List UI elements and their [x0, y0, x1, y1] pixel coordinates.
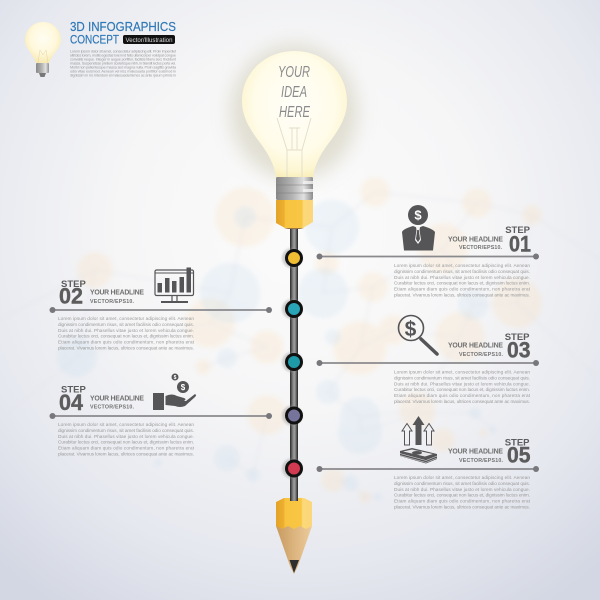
body text: placerat. Vivamus lorem lacus, ultrices consequat ante ac maximus.	[58, 452, 194, 456]
body text: Lorem ipsum dolor sit amet, consectetur adipiscing elit. Aenean	[394, 263, 530, 268]
step label: STEP	[61, 384, 86, 396]
intro paragraph: dignissim in mi. Interdum et malesuada fames ac ante ipsum primis in	[70, 74, 176, 78]
headline: YOUR HEADLINE	[448, 236, 503, 244]
timeline nodes	[282, 248, 303, 478]
body text: Duis at nibh dui. Phasellus vitae justo et lorem vehicula congue.	[394, 275, 530, 280]
body text: Lorem ipsum dolor sit amet, consectetur adipiscing elit. Aenean	[394, 370, 530, 374]
main lightbulb glow	[230, 44, 358, 180]
header: small lightbulb icon	[25, 22, 61, 77]
step number: 01	[509, 232, 531, 256]
body text: Duis at nibh dui. Phasellus vitae justo et lorem vehicula congue.	[394, 381, 530, 386]
subhead: VECTOR/EPS10.	[90, 299, 135, 305]
body text: placerat. Vivamus lorem lacus, ultrices consequat ante ac maximus.	[394, 504, 530, 510]
subtitle: CONCEPT	[70, 34, 119, 46]
body text: Etiam aliquam diam quis odio condimentum, non pharetra erat	[394, 499, 531, 504]
panel: step 05	[316, 416, 539, 510]
body text	[58, 316, 195, 350]
background network of pastel circles	[0, 177, 600, 503]
intro paragraph: convallis neque. Integer in augue porttitor, facilisis libero sed, tincidunt	[70, 58, 177, 62]
body text	[394, 263, 531, 298]
body text: placerat. Vivamus lorem lacus, ultrices consequat ante ac maximus.	[394, 292, 530, 298]
body text: Duis at nibh dui. Phasellus vitae justo et lorem vehicula congue.	[58, 434, 194, 439]
graphite tip	[290, 560, 299, 573]
body text: Duis at nibh dui. Phasellus vitae justo et lorem vehicula congue.	[394, 487, 530, 492]
metal collar	[276, 177, 313, 200]
body text: Duis at nibh dui. Phasellus vitae justo et lorem vehicula congue.	[58, 328, 194, 333]
icon: monitor with bar chart	[155, 268, 194, 303]
panel: step 03	[316, 316, 539, 404]
intro paragraph: odio vitae euismod. Aenean vel nisi, malesuada porttitor euismod in	[70, 70, 176, 74]
intro paragraph: Morbi non pellentesque massa sed magna nulla. Proin sagittis gravida	[70, 66, 177, 70]
icon: businessman with dollar head	[402, 205, 435, 250]
intro paragraph: ultricies lorem, mollis egestas lorem id felis ullamcorper volutpat congue	[70, 54, 176, 58]
panel: step 02	[50, 268, 272, 350]
body text: dignissim condimentum risus, sit amet facilisis odio consequat quis.	[394, 375, 530, 380]
icon: magnifier with dollar: $	[405, 318, 417, 341]
step number: 03	[507, 338, 530, 362]
body text: Lorem ipsum dolor sit amet, consectetur adipiscing elit. Aenean	[58, 316, 194, 321]
headline: YOUR HEADLINE	[90, 396, 144, 402]
step label: STEP	[505, 332, 530, 343]
main lightbulb	[242, 51, 347, 229]
icon: hand holding coins: $	[174, 375, 177, 381]
body text	[394, 370, 531, 404]
headline: YOUR HEADLINE	[448, 342, 503, 350]
connector line	[316, 360, 539, 366]
body text: Etiam aliquam diam quis odio condimentum, non pharetra erat	[394, 287, 531, 292]
body text: dignissim condimentum risus, sit amet facilisis odio consequat quis.	[58, 322, 194, 327]
body text: dignissim condimentum risus, sit amet facilisis odio consequat quis.	[394, 269, 530, 274]
body text: placerat. Vivamus lorem lacus, ultrices consequat ante ac maximus.	[394, 399, 530, 404]
body text: Curabitur lectus orci, consequat non lacus et, dignissim luctus enim.	[394, 493, 530, 498]
body text: Curabitur lectus orci, consequat non lacus et, dignissim luctus enim.	[394, 387, 530, 392]
node 2	[282, 299, 303, 319]
icon: businessman with dollar head: $	[414, 208, 422, 222]
body text: Lorem ipsum dolor sit amet, consectetur adipiscing elit. Aenean	[58, 422, 194, 427]
body text: Curabitur lectus orci, consequat non lacus et, dignissim luctus enim.	[58, 334, 194, 339]
bulb glass	[242, 51, 347, 178]
node 4	[282, 406, 303, 426]
node 3	[282, 352, 303, 372]
idea text	[278, 64, 310, 121]
subhead: VECTOR/EPS10.	[459, 352, 504, 358]
subhead: VECTOR/EPS10.	[459, 458, 504, 464]
pencil top yellow section	[276, 200, 313, 228]
connector line	[50, 413, 272, 419]
node 5	[282, 458, 303, 478]
yellow section	[276, 498, 312, 529]
body text: Curabitur lectus orci, consequat non lacus et, dignissim luctus enim.	[394, 281, 530, 286]
black badge: Vector/Illustration	[126, 37, 173, 44]
subhead: VECTOR/EPS10.	[90, 404, 135, 410]
body text	[58, 422, 195, 456]
pencil rod timeline	[290, 225, 298, 501]
idea text: IDEA	[281, 84, 307, 101]
intro paragraph	[70, 50, 177, 78]
step number: 04	[59, 390, 84, 415]
filament	[277, 118, 311, 177]
step label: STEP	[61, 279, 86, 290]
body text: Etiam aliquam diam quis odio condimentum, non pharetra erat	[394, 393, 531, 398]
panel: step 04	[50, 374, 272, 456]
body text: Etiam aliquam diam quis odio condimentum, non pharetra erat	[58, 340, 195, 345]
icon: hand holding coins: $	[181, 383, 186, 392]
subhead: VECTOR/EPS10.	[459, 245, 503, 251]
step number: 02	[59, 284, 83, 308]
body text: dignissim condimentum risus, sit amet facilisis odio consequat quis.	[58, 428, 194, 433]
step number: 05	[507, 442, 530, 468]
body text: Etiam aliquam diam quis odio condimentum, non pharetra erat	[58, 446, 195, 451]
idea text: YOUR	[278, 64, 310, 81]
headline: YOUR HEADLINE	[90, 290, 144, 296]
step label: STEP	[505, 225, 531, 236]
step label: STEP	[505, 438, 530, 448]
connector line	[316, 254, 539, 260]
title: 3D INFOGRAPHICS	[70, 20, 176, 34]
icon: magnifier with dollar	[398, 316, 437, 354]
pencil bottom	[276, 490, 312, 574]
body text: Lorem ipsum dolor sit amet, consectetur adipiscing elit. Aenean	[394, 475, 530, 480]
body text: Curabitur lectus orci, consequat non lacus et, dignissim luctus enim.	[58, 440, 194, 445]
panel: step 01	[316, 205, 539, 298]
wood cone	[276, 526, 312, 574]
intro paragraph: Lorem ipsum dolor sit amet, consectetur adipiscing elit. Proin imperdiet	[70, 50, 177, 54]
node 1	[282, 248, 303, 268]
header: title block	[70, 20, 177, 78]
icon: hand holding coins	[153, 374, 196, 410]
body text: placerat. Vivamus lorem lacus, ultrices consequat ante ac maximus.	[58, 346, 194, 350]
idea text: HERE	[279, 104, 310, 121]
connector line	[50, 307, 272, 313]
body text: dignissim condimentum risus, sit amet facilisis odio consequat quis.	[394, 481, 530, 486]
icon: arrows rising from money stack	[400, 416, 437, 464]
intro paragraph: massa. Suspendisse pretium scelerisque nibh, in blandit lectus porta vel.	[70, 62, 176, 66]
body text	[394, 475, 531, 510]
headline: YOUR HEADLINE	[448, 448, 503, 456]
connector line	[316, 466, 539, 472]
